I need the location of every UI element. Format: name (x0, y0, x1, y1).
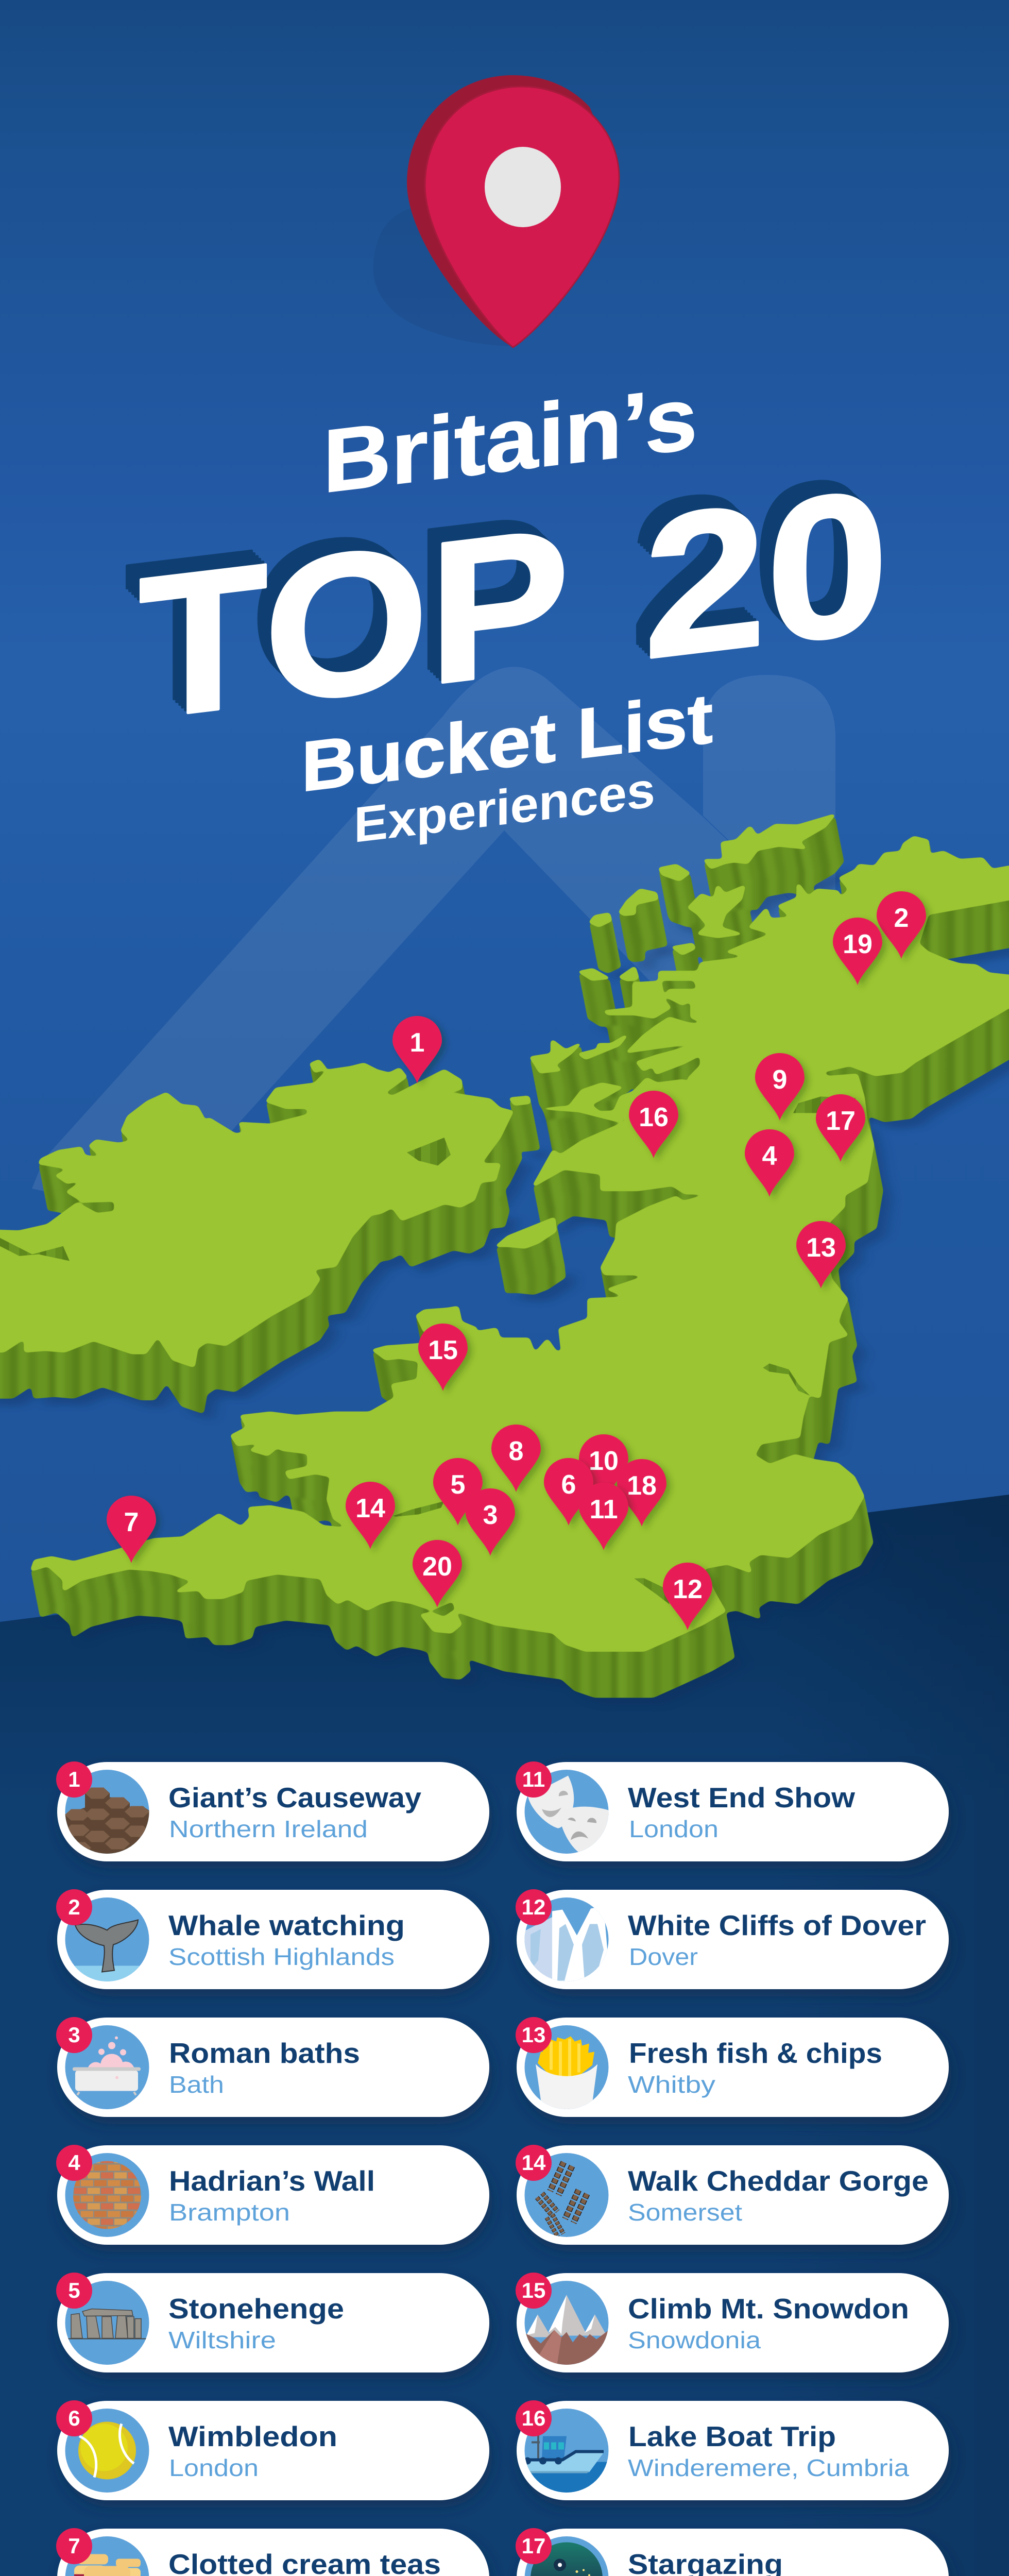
badge 15 (516, 2273, 552, 2309)
badge 1 (56, 1761, 92, 1798)
badge 3: 3 (68, 2023, 80, 2047)
pin 5 (433, 1458, 483, 1526)
watermark: translucent logo mountain (32, 667, 927, 1216)
badge 16: 16 (522, 2406, 545, 2430)
badge 15: 15 (522, 2278, 545, 2302)
title: 20: 20 (638, 442, 883, 696)
location: Bath (169, 2071, 224, 2098)
background: upper blue sea (0, 0, 1009, 1700)
badge 11 (516, 1761, 552, 1798)
pin 20 (413, 1540, 462, 1607)
badge 14: 14 (522, 2150, 546, 2175)
icon: white cliffs (523, 1897, 609, 1986)
pin 11: 11 (590, 1495, 618, 1524)
location: Whitby (628, 2071, 715, 2098)
pin 16 (629, 1091, 678, 1158)
pin 8 (491, 1425, 541, 1492)
title: 20: 20 (641, 444, 886, 699)
icon: theatre masks (524, 1769, 610, 1854)
badge 2: 2 (68, 1895, 80, 1919)
card 16: Lake Boat Trip (516, 2400, 949, 2500)
pin 13: 13 (806, 1233, 836, 1263)
pin 2: 2 (894, 903, 909, 933)
pin 7 (107, 1496, 156, 1563)
pin 3 (466, 1488, 515, 1556)
pin 10: 10 (589, 1446, 619, 1476)
badge 13 (516, 2017, 552, 2053)
card 12: White Cliffs of Dover (516, 1889, 949, 1989)
card 1: Giant's Causeway (56, 1761, 489, 1861)
badge 7 (56, 2528, 92, 2564)
badge 3 (56, 2017, 92, 2053)
pin 6: 6 (561, 1470, 576, 1500)
badge 12 (516, 1889, 552, 1925)
badge 13: 13 (522, 2023, 545, 2047)
pin 1 (392, 1016, 442, 1083)
title: West End Show (628, 1782, 855, 1814)
card 7: Clotted cream teas (56, 2528, 489, 2576)
pin 4 (745, 1129, 794, 1197)
title: Fresh fish & chips (629, 2037, 882, 2069)
card 17: Stargazing (516, 2528, 949, 2576)
pin 2 (877, 891, 926, 959)
title: TOP: TOP (127, 474, 558, 751)
pin 20: 20 (422, 1552, 452, 1582)
badge 17: 17 (522, 2534, 545, 2558)
pin 17: 17 (826, 1106, 856, 1136)
title: Whale watching (168, 1909, 405, 1941)
map pins (107, 891, 926, 1630)
title: 20: 20 (632, 436, 877, 690)
icon: boat (523, 2408, 610, 2496)
badge 7: 7 (68, 2534, 80, 2558)
pin 10 (579, 1434, 628, 1502)
badge 11: 11 (522, 1767, 545, 1791)
title: TOP: TOP (130, 477, 561, 754)
location: Northern Ireland (169, 1816, 368, 1842)
pin 16: 16 (639, 1103, 669, 1132)
title: White Cliffs of Dover (628, 1909, 926, 1941)
pin 17 (816, 1094, 865, 1162)
icon: bath (65, 2025, 149, 2109)
title: 20: 20 (630, 433, 875, 688)
title: Britain's: Britain’s (323, 367, 697, 512)
pin 15 (418, 1324, 468, 1391)
background: lower navy panel (0, 1495, 1009, 2576)
icon: chips (524, 2025, 609, 2111)
badge 16 (516, 2400, 552, 2436)
icon: brick wall (65, 2153, 149, 2237)
card 5: Stonehenge (56, 2273, 489, 2372)
card 2: Whale watching (56, 1889, 489, 1989)
badge 14 (516, 2145, 552, 2181)
title: TOP: TOP (125, 471, 556, 748)
location: London (629, 1816, 719, 1842)
map: 3D Britain and Ireland (0, 815, 1009, 1705)
badge 6 (56, 2400, 92, 2436)
badge 1: 1 (68, 1767, 80, 1791)
pin 3: 3 (483, 1500, 498, 1530)
pin 19 (833, 918, 882, 985)
title: Bucket List: Bucket List (301, 679, 713, 807)
pin 7: 7 (124, 1507, 139, 1537)
pin 8: 8 (509, 1436, 523, 1466)
title: 20: 20 (636, 439, 880, 693)
pin 6 (544, 1458, 593, 1526)
icon: tennis ball (65, 2408, 149, 2493)
pin 5: 5 (451, 1470, 465, 1500)
title: Experiences: Experiences (354, 761, 655, 853)
pin 15: 15 (428, 1335, 458, 1365)
pin 14 (346, 1482, 395, 1549)
card 14: Walk Cheddar Gorge (516, 2145, 949, 2245)
card 3: Roman baths (56, 2017, 489, 2117)
pin 9: 9 (773, 1065, 787, 1095)
card 15: Climb Mt. Snowdon (516, 2273, 949, 2372)
pin 18: 18 (627, 1471, 657, 1501)
icon: whale tail (63, 1897, 151, 1987)
pin 13 (796, 1221, 846, 1289)
location: Wiltshire (168, 2327, 276, 2353)
card 11: West End Show (516, 1761, 949, 1861)
title: Lake Boat Trip (628, 2420, 836, 2452)
badge 5: 5 (68, 2278, 80, 2302)
pin 11 (579, 1483, 628, 1550)
title: Walk Cheddar Gorge (628, 2165, 929, 2197)
pin 4: 4 (762, 1141, 777, 1171)
title: Giant’s Causeway (168, 1782, 421, 1814)
badge 6: 6 (68, 2406, 80, 2430)
title: TOP: TOP (133, 480, 564, 756)
location: Brampton (169, 2199, 290, 2226)
location: Dover (629, 1943, 698, 1970)
badge 2 (56, 1889, 92, 1925)
location: Scottish Highlands (168, 1943, 395, 1970)
pin 9 (755, 1053, 805, 1121)
icon: stonehenge (63, 2280, 151, 2365)
pin 19: 19 (843, 929, 873, 959)
card 4: Hadrian's Wall (56, 2145, 489, 2245)
badge 5 (56, 2273, 92, 2309)
icon: night sky (524, 2536, 609, 2576)
icon: basalt columns (63, 1769, 151, 1856)
card 6: Wimbledon (56, 2400, 489, 2500)
location: London (169, 2454, 259, 2481)
pin 12: 12 (673, 1574, 703, 1604)
pin 18 (617, 1459, 666, 1527)
location: Winderemere, Cumbria (628, 2454, 909, 2481)
location: Snowdonia (628, 2327, 761, 2353)
pin 14: 14 (355, 1494, 385, 1523)
title: TOP: TOP (136, 482, 567, 759)
icon: boot prints (524, 2153, 609, 2237)
title: Climb Mt. Snowdon (628, 2293, 909, 2325)
title: Wimbledon (168, 2420, 337, 2452)
location: Somerset (628, 2199, 742, 2226)
title: Hadrian’s Wall (169, 2165, 375, 2197)
title: Roman baths (169, 2037, 360, 2069)
badge 4: 4 (68, 2150, 80, 2175)
title: Stonehenge (168, 2293, 344, 2325)
title: 20: 20 (644, 447, 888, 702)
icon: large map pin (373, 75, 619, 347)
badge 12: 12 (522, 1895, 545, 1919)
card 13: Fresh fish and chips (516, 2017, 949, 2117)
pin 12 (663, 1563, 712, 1630)
badge 17 (516, 2528, 552, 2564)
pin 1: 1 (410, 1028, 424, 1058)
icon: scones (65, 2536, 149, 2576)
badge 4 (56, 2145, 92, 2181)
title: TOP: TOP (139, 485, 570, 762)
icon: mountains (523, 2280, 610, 2369)
